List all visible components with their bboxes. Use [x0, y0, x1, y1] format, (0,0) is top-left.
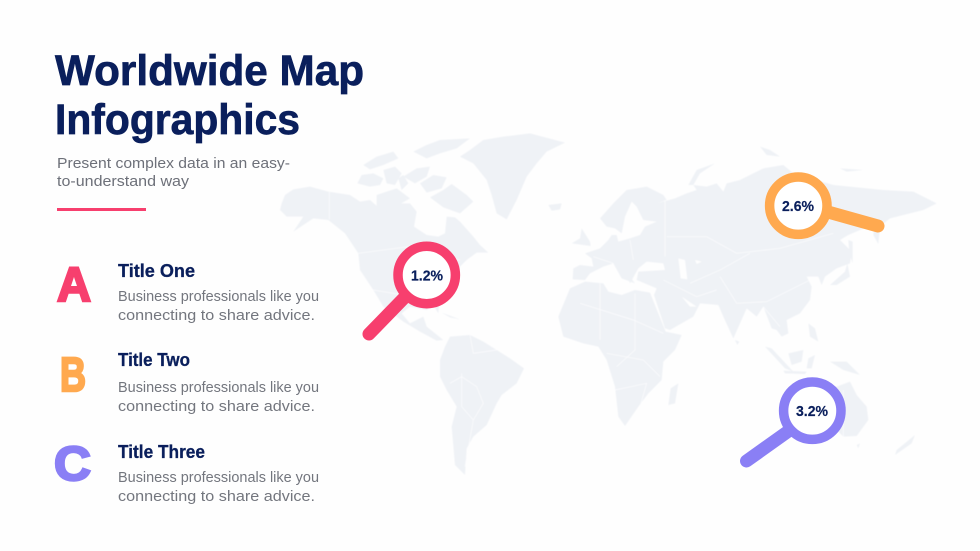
- text: description one: [118, 289, 319, 324]
- magnifier: 1.2%: 1.2%: [411, 268, 443, 284]
- icon: letter C: C: [54, 438, 91, 491]
- icon: letter B: B: [60, 349, 86, 402]
- accent divider: [57, 208, 146, 211]
- heading: Title Three: Title Three: [118, 442, 205, 462]
- text: description three: Business professionals like you: [118, 470, 319, 486]
- icon: letter A: A: [57, 259, 91, 312]
- title: Infographics: [55, 96, 300, 144]
- map: inland seas: [678, 258, 702, 307]
- magnifier: 3.2%: [746, 382, 841, 461]
- magnifier: 2.6%: 2.6%: [782, 198, 814, 215]
- title: Worldwide Map: [55, 47, 364, 95]
- map: the Americas and Greenland: [280, 133, 565, 475]
- text: description one: Business professionals like you: [118, 289, 319, 305]
- text: description three: connecting to share advice.: [118, 489, 315, 505]
- text: description one: connecting to share advice.: [118, 308, 315, 324]
- text: description two: Business professionals like you: [118, 380, 319, 396]
- text: description two: [118, 380, 319, 415]
- heading: Title One: Title One: [118, 261, 195, 281]
- world map: [280, 133, 937, 475]
- item C: [54, 438, 319, 505]
- title: [55, 47, 364, 144]
- subtitle: Present complex data in an easy-: [57, 155, 290, 172]
- text: description three: [118, 470, 319, 505]
- magnifier: 1.2%: [369, 246, 455, 334]
- subtitle: [57, 155, 290, 190]
- subtitle: to-understand way: [57, 173, 190, 190]
- text: description two: connecting to share advice.: [118, 399, 315, 415]
- item A: [57, 259, 319, 324]
- magnifier: 2.6%: [770, 177, 878, 234]
- item B: [60, 349, 319, 415]
- magnifier: 3.2%: 3.2%: [796, 403, 828, 420]
- heading: Title Two: Title Two: [118, 350, 190, 370]
- map: Europe, Asia, Africa and Oceania: [550, 147, 937, 455]
